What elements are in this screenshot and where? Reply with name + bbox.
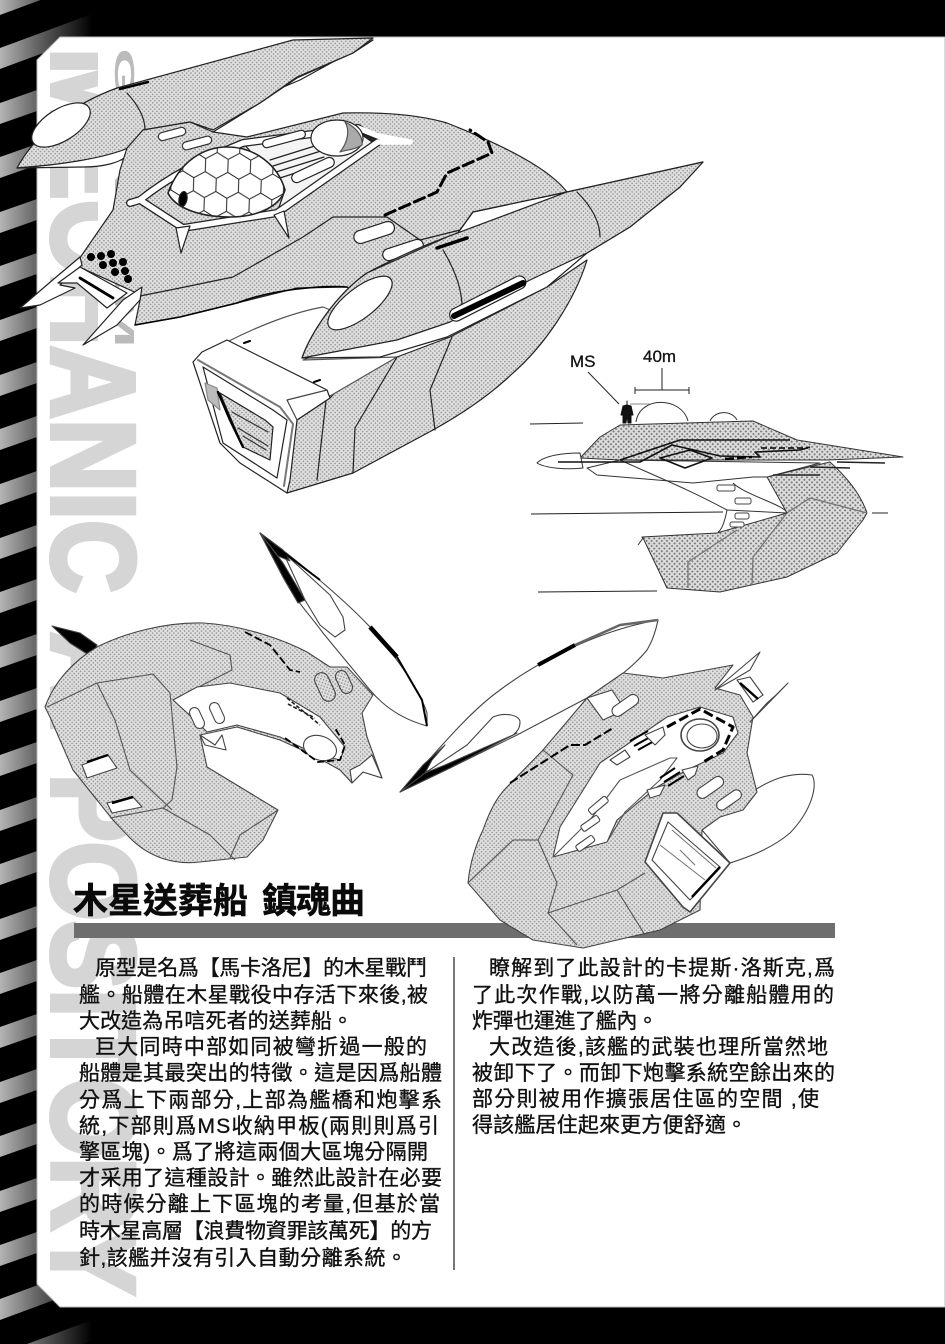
hull seams	[47, 640, 278, 860]
body text: right column: 了此次作戰,以防萬一將分離船體用的	[472, 984, 834, 1007]
body text: right column	[472, 957, 835, 1137]
small slots	[717, 485, 751, 527]
title	[73, 882, 365, 921]
body text: left column: 分爲上下兩部分,上部為艦橋和炮擊系	[79, 1089, 442, 1112]
central white deck	[553, 707, 738, 857]
lower hull side	[642, 462, 867, 592]
upper hull	[75, 113, 567, 325]
body text: left column	[79, 957, 442, 1270]
domes	[636, 402, 737, 422]
nozzle vents and slots	[20, 220, 425, 345]
scale lines	[530, 368, 888, 592]
lower right ship illustration	[400, 620, 814, 948]
body text: left column: 巨大同時中部如同被彎折過一般的	[95, 1036, 427, 1059]
engine block	[645, 813, 730, 912]
lower left ship illustration	[45, 533, 427, 863]
body text: left column: 才采用了這種設計。雖然此設計在必要	[79, 1167, 442, 1190]
hull	[468, 665, 757, 948]
mobile suit figure	[621, 401, 633, 423]
title: 鎮魂曲	[262, 882, 365, 921]
body text: left column: 統,下部則爲MS收納甲板(兩則則爲引	[79, 1115, 439, 1138]
hull windows	[82, 755, 117, 778]
hexagonal dome	[168, 147, 285, 217]
left diagonal stripe band	[0, 0, 92, 1344]
rear fins	[350, 755, 382, 783]
body text: right column: 部分則被用作擴張居住區的空間 ,使	[472, 1088, 819, 1111]
upper weapon pod	[17, 38, 373, 168]
title divider bar	[74, 923, 835, 938]
body text: right column: 大改造後,該艦的武裝也理所當然地	[489, 1036, 828, 1059]
side view schematic with scale	[530, 347, 903, 592]
right weapon pod	[302, 162, 703, 358]
watermark: vertical grey title: GUNDAM	[109, 48, 140, 348]
watermark: vertical grey title	[26, 44, 158, 1295]
MS label: MS	[570, 352, 596, 371]
upper hull side	[580, 421, 903, 460]
top emitters	[715, 652, 760, 690]
lower hull and engine section	[193, 260, 587, 493]
left pod	[400, 620, 658, 792]
body text: left column: 時木星高層【浪費物資罪該萬死】的方	[79, 1220, 432, 1243]
body text: left column: 大改造為吊唁死者的送葬船。	[79, 1010, 353, 1033]
wing slots	[587, 690, 625, 720]
hull	[45, 623, 382, 863]
hull seams	[468, 750, 645, 945]
slots on wing root	[312, 670, 338, 704]
body text: right column: 炸彈也運進了艦內。	[472, 1010, 658, 1033]
body text: left column: 船體是其最突出的特徵。這是因爲船體	[79, 1062, 442, 1085]
right pod	[702, 774, 814, 863]
deck slats	[630, 731, 684, 786]
body text: left column: 的時候分離上下區塊的考量,但基於當	[79, 1193, 440, 1216]
40m label: 40m	[643, 347, 676, 366]
body text: right column: 瞭解到了此設計的卡提斯·洛斯克,爲	[489, 957, 835, 980]
body text: left column: 針,該艦并沒有引入自動分離系統。	[79, 1247, 407, 1270]
body text: left column: 艦。船體在木星戰役中存活下來後,被	[79, 984, 428, 1007]
column divider	[453, 957, 455, 1270]
white engine bay	[173, 683, 345, 760]
watermark: vertical grey title: MECHANIC	[26, 48, 158, 593]
white underside	[587, 460, 820, 483]
body text: right column: 得該艦居住起來更方便舒適。	[472, 1114, 747, 1137]
body text: left column: 原型是名爲【馬卡洛尼】的木星戰鬥	[95, 957, 427, 980]
title: 木星送葬船	[73, 882, 248, 921]
body text: right column: 被卸下了。而卸下炮擊系統空餘出來的	[472, 1062, 835, 1085]
bridge frame	[130, 120, 410, 253]
body text: left column: 擎區塊)。爲了將這兩個大區塊分隔開	[79, 1141, 428, 1164]
main ship illustration	[17, 38, 703, 493]
black spike	[52, 626, 97, 657]
detached pod	[260, 533, 427, 726]
